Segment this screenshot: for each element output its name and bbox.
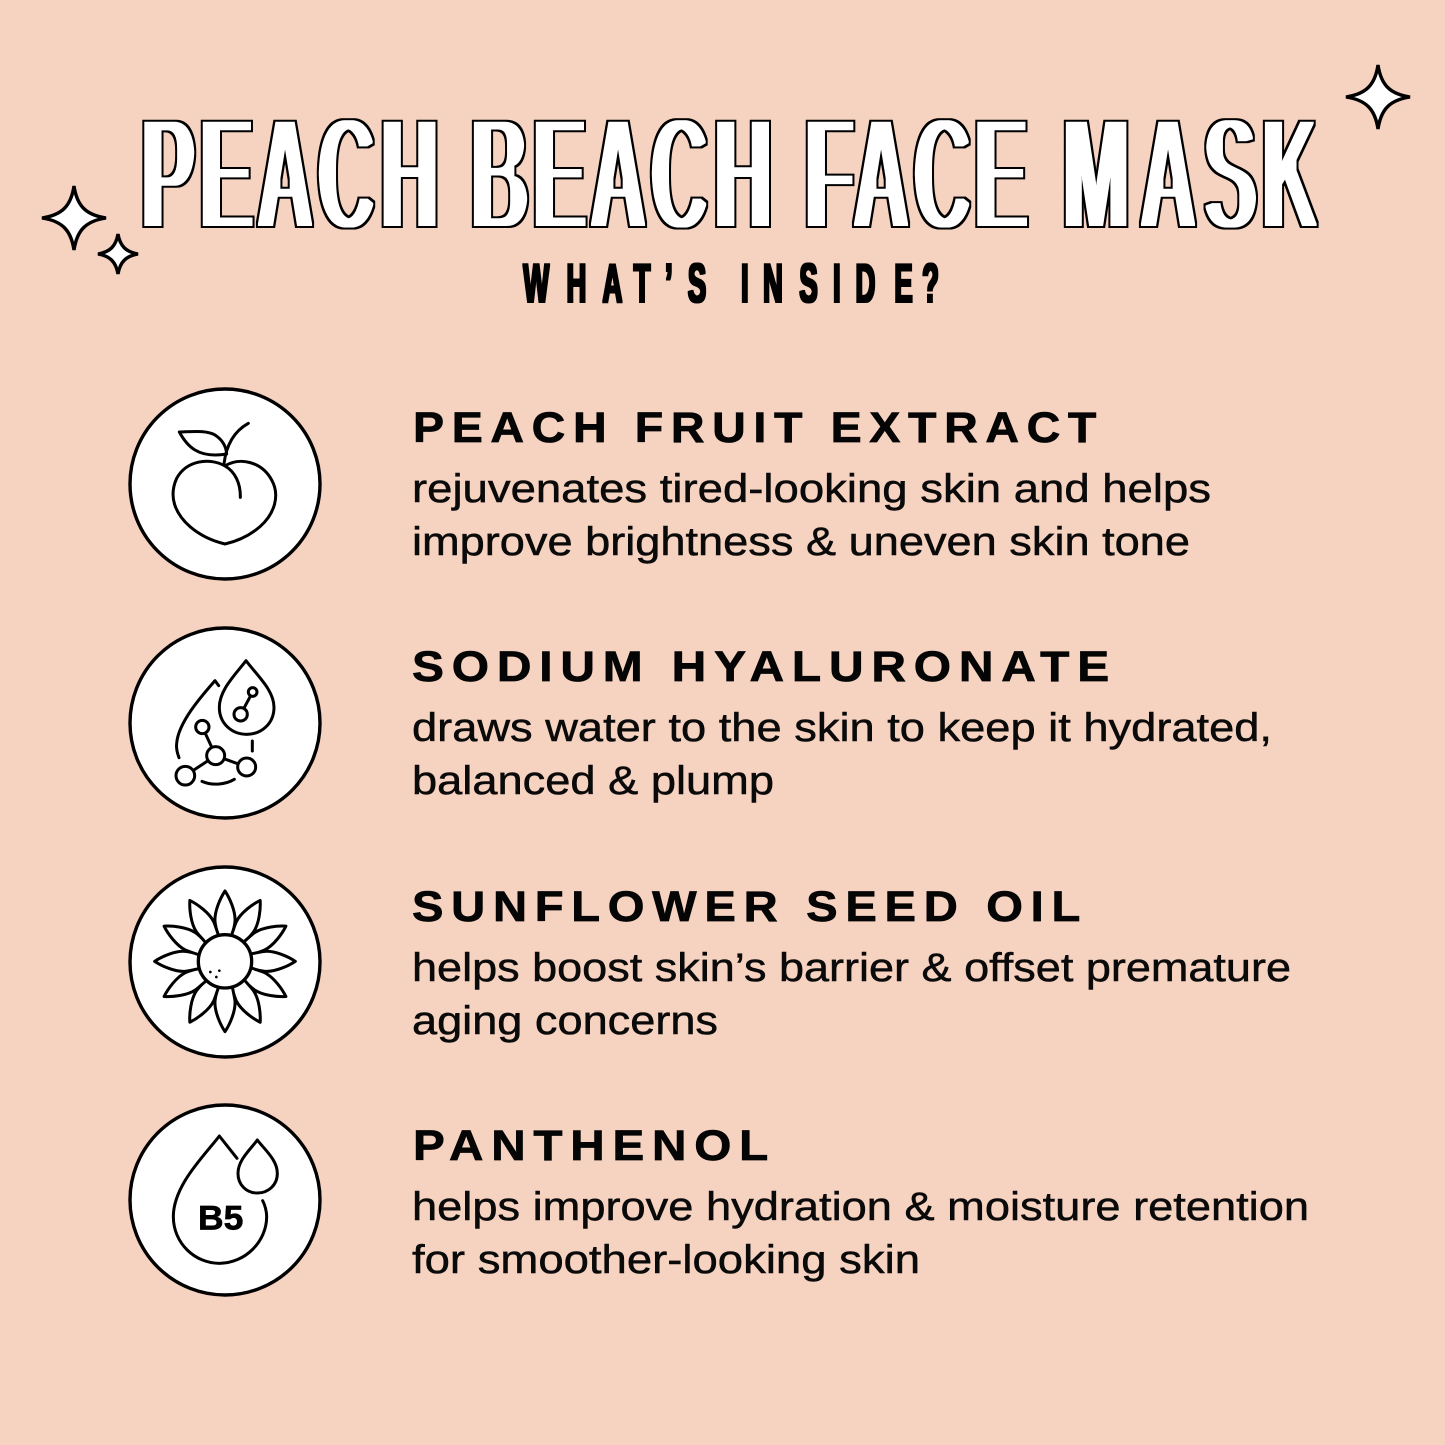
icon: large sparkle top right <box>1346 65 1410 129</box>
heading: PANTHENOL <box>413 1122 776 1170</box>
description: helps boost skin’s barrier & offset premature <box>412 946 1291 990</box>
icon: B5 droplets <box>130 1105 320 1295</box>
icon: sunflower <box>130 867 320 1057</box>
description <box>412 467 1211 564</box>
heading: SODIUM HYALURONATE <box>412 643 1117 691</box>
description <box>412 946 1291 1043</box>
ingredient: sodium hyaluronate <box>130 628 1272 818</box>
description: helps improve hydration & moisture retention <box>412 1185 1309 1229</box>
title: PEACH BEACH FACE MASK <box>142 83 1319 267</box>
icon: molecule and droplets <box>130 628 320 818</box>
ingredient: peach fruit extract <box>130 389 1211 579</box>
description: rejuvenates tired-looking skin and helps <box>412 467 1211 511</box>
description: balanced & plump <box>412 759 774 803</box>
subtitle: WHAT’S INSIDE? <box>523 254 939 315</box>
heading: PEACH FRUIT EXTRACT <box>413 404 1104 452</box>
description: draws water to the skin to keep it hydrated, <box>412 706 1272 750</box>
ingredient: sunflower seed oil <box>130 867 1291 1057</box>
icon: small sparkle left <box>98 234 138 274</box>
icon: peach <box>130 389 320 579</box>
description <box>412 706 1272 803</box>
icon: large sparkle left <box>42 186 106 250</box>
ingredient: panthenol <box>130 1105 1309 1295</box>
heading: SUNFLOWER SEED OIL <box>412 883 1088 931</box>
description: aging concerns <box>412 999 718 1043</box>
description: improve brightness & uneven skin tone <box>412 520 1190 564</box>
icon: B5 droplets: B5 <box>198 1199 243 1237</box>
description <box>412 1185 1309 1282</box>
description: for smoother-looking skin <box>412 1238 920 1282</box>
